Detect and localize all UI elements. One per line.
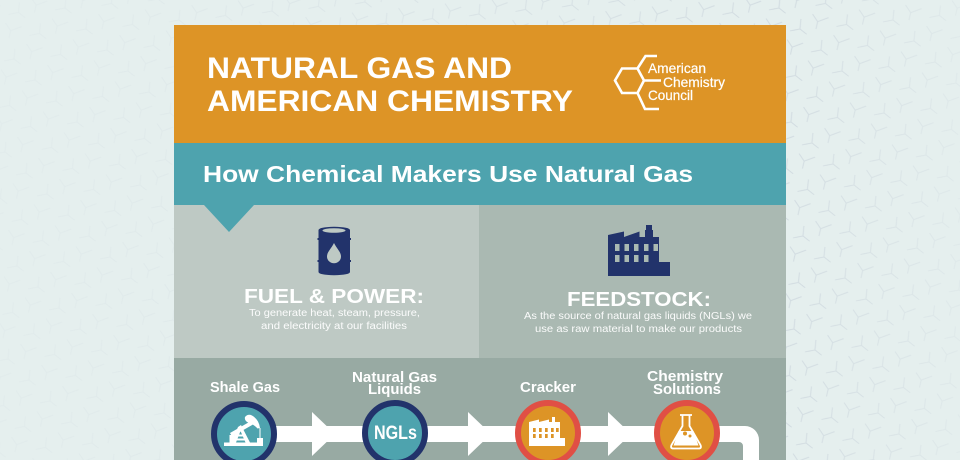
- icon: shale gas pump jack: [214, 404, 274, 460]
- logo: American Chemistry Council: [615, 56, 725, 109]
- heading: fuel and power: FUEL & POWER:: [244, 285, 424, 308]
- label: natural gas liquids: Liquids: [368, 382, 421, 398]
- text: feedstock description: [524, 311, 752, 335]
- panel: header: [174, 25, 786, 143]
- heading: feedstock: FEEDSTOCK:: [567, 288, 711, 311]
- text: fuel and power description: To generate heat, steam, pressure,: [249, 308, 420, 319]
- title: AMERICAN CHEMISTRY: [207, 85, 573, 118]
- panel: subtitle banner: [174, 143, 786, 232]
- text: feedstock description: use as raw material to make our products: [535, 324, 742, 335]
- label: cracker: Cracker: [520, 380, 576, 396]
- icon: NGLs: NGLs: [374, 423, 417, 444]
- label: chemistry solutions: Chemistry: [647, 369, 723, 385]
- panel: feedstock: [479, 205, 786, 358]
- label: shale gas: Shale Gas: [210, 380, 280, 396]
- icon: cracker factory: [518, 403, 578, 460]
- title: NATURAL GAS AND: [207, 52, 512, 85]
- subtitle: How Chemical Makers Use Natural Gas: [203, 161, 693, 187]
- text: fuel and power description: [249, 308, 420, 332]
- label: chemistry solutions: [647, 369, 723, 398]
- logo: American Chemistry Council: Council: [648, 87, 693, 103]
- icon: chemistry flask: [657, 403, 717, 460]
- icon: oil barrel: [318, 227, 351, 275]
- panel: fuel and power: [174, 205, 479, 358]
- label: natural gas liquids: [352, 370, 437, 398]
- logo: American Chemistry Council: Chemistry: [663, 74, 725, 90]
- panel: process flow: [174, 358, 786, 460]
- icon: NGLs: [365, 403, 425, 460]
- text: fuel and power description: and electricity at our facilities: [261, 321, 407, 332]
- logo: American Chemistry Council: American: [648, 60, 706, 76]
- icon: factory: [608, 225, 670, 276]
- arrow: flow band: [270, 412, 759, 460]
- title: [207, 52, 573, 118]
- text: feedstock description: As the source of natural gas liquids (NGLs) we: [524, 311, 752, 322]
- label: chemistry solutions: Solutions: [653, 382, 721, 398]
- label: natural gas liquids: Natural Gas: [352, 370, 437, 386]
